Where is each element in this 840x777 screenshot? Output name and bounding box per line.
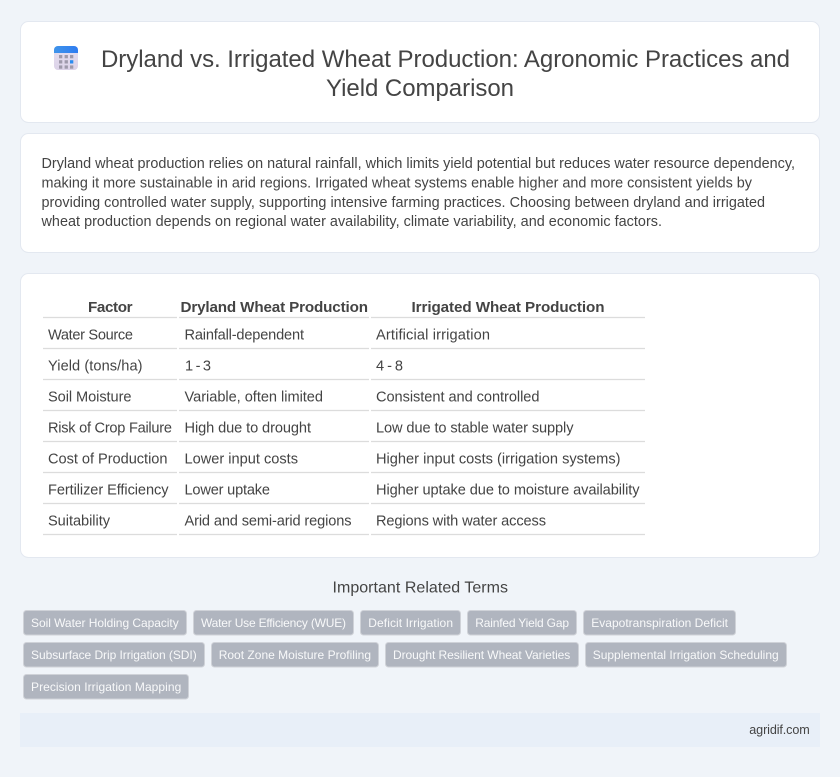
table row: risk of crop failure: Risk of Crop Failure [48, 420, 172, 436]
tag: drought resilient wheat varieties: Drought Resilient Wheat Varieties [393, 648, 570, 662]
table row: suitability: Arid and semi-arid regions [184, 514, 352, 530]
table row: suitability: Suitability [48, 514, 111, 530]
tag: subsurface drip irrigation [24, 642, 204, 667]
footer bar [20, 713, 820, 747]
table row: cost of production [43, 452, 645, 472]
tag: precision irrigation mapping [24, 674, 188, 699]
table row: risk of crop failure [43, 420, 645, 442]
text block: summary: Dryland wheat production relies on natural rainfall, which limits yield potential but reduces water resource dependency, [42, 156, 795, 172]
table row: fertilizer efficiency: Higher uptake due to moisture availability [376, 482, 640, 498]
table row: soil moisture: Soil Moisture [48, 390, 132, 406]
panel: summary paragraph [20, 134, 820, 252]
panel: comparison table [20, 274, 820, 558]
tag: rainfed yield gap: Rainfed Yield Gap [475, 616, 569, 630]
table row: cost of production: Cost of Production [48, 452, 168, 468]
tag: root zone moisture profiling [212, 642, 378, 667]
tag: rainfed yield gap [468, 610, 576, 635]
table row: fertilizer efficiency [43, 482, 645, 504]
table row: water source: Water Source [48, 328, 133, 344]
tag: precision irrigation mapping: Precision Irrigation Mapping [31, 680, 181, 694]
table row: water source [43, 328, 645, 348]
table row: water source: Rainfall-dependent [184, 328, 304, 344]
text block: summary: wheat production depends on regional water availability, climate variability, and economic factors. [40, 214, 662, 230]
table header: Irrigated Wheat Production [412, 299, 604, 316]
table row: suitability: Regions with water access [376, 514, 546, 530]
tag: water use efficiency: Water Use Efficiency (WUE) [201, 616, 346, 630]
text block: summary [40, 156, 795, 230]
footer source text: agridif.com [749, 723, 810, 737]
table row: suitability [43, 514, 645, 534]
table row: soil moisture [43, 390, 645, 410]
tag: soil water holding capacity [24, 610, 186, 635]
table header: Dryland Wheat Production [180, 299, 368, 316]
table row: soil moisture: Consistent and controlled [376, 390, 540, 406]
text block: summary: providing controlled water supply, supporting intensive farming practices. Choosing between dryland and irrigated [42, 195, 765, 211]
heading: related terms: Important Related Terms [332, 580, 508, 596]
table row: yield: 4 - 8 [376, 358, 403, 374]
table row: cost of production: Lower input costs [184, 452, 298, 468]
table row: risk of crop failure: High due to drought [184, 420, 311, 436]
tag: deficit irrigation: Deficit Irrigation [368, 616, 453, 630]
panel: title [20, 22, 820, 122]
tag: supplemental irrigation scheduling [586, 642, 786, 667]
tag: subsurface drip irrigation: Subsurface Drip Irrigation (SDI) [31, 648, 197, 662]
tag: water use efficiency [194, 610, 354, 635]
heading: page title: Yield Comparison [326, 75, 514, 102]
table row: soil moisture: Variable, often limited [184, 390, 323, 406]
tag: root zone moisture profiling: Root Zone Moisture Profiling [219, 648, 371, 662]
tag: soil water holding capacity: Soil Water Holding Capacity [31, 616, 179, 630]
heading: page title [101, 46, 790, 102]
table row: fertilizer efficiency: Fertilizer Efficiency [48, 482, 169, 498]
tag: drought resilient wheat varieties [386, 642, 578, 667]
tag: supplemental irrigation scheduling: Supplemental Irrigation Scheduling [593, 648, 779, 662]
table row: yield [43, 358, 645, 380]
table row: yield: Yield (tons/ha) [48, 358, 142, 374]
table row: water source: Artificial irrigation [376, 328, 490, 344]
table row: risk of crop failure: Low due to stable water supply [376, 420, 574, 436]
tag: evapotranspiration deficit: Evapotranspiration Deficit [591, 616, 729, 630]
heading: page title: Dryland vs. Irrigated Wheat Production: Agronomic Practices and [101, 46, 790, 73]
icon: calendar [54, 46, 78, 70]
table row: cost of production: Higher input costs (irrigation systems) [376, 452, 620, 468]
table row: yield: 1 - 3 [185, 358, 211, 374]
tag: evapotranspiration deficit [584, 610, 736, 635]
table header: Factor [88, 299, 133, 316]
table header [43, 299, 645, 318]
text block: summary: making it more sustainable in arid regions. Irrigated wheat systems enable higher and more consistent yields by [42, 176, 753, 192]
tag: deficit irrigation [360, 610, 460, 635]
table row: fertilizer efficiency: Lower uptake [184, 482, 270, 498]
